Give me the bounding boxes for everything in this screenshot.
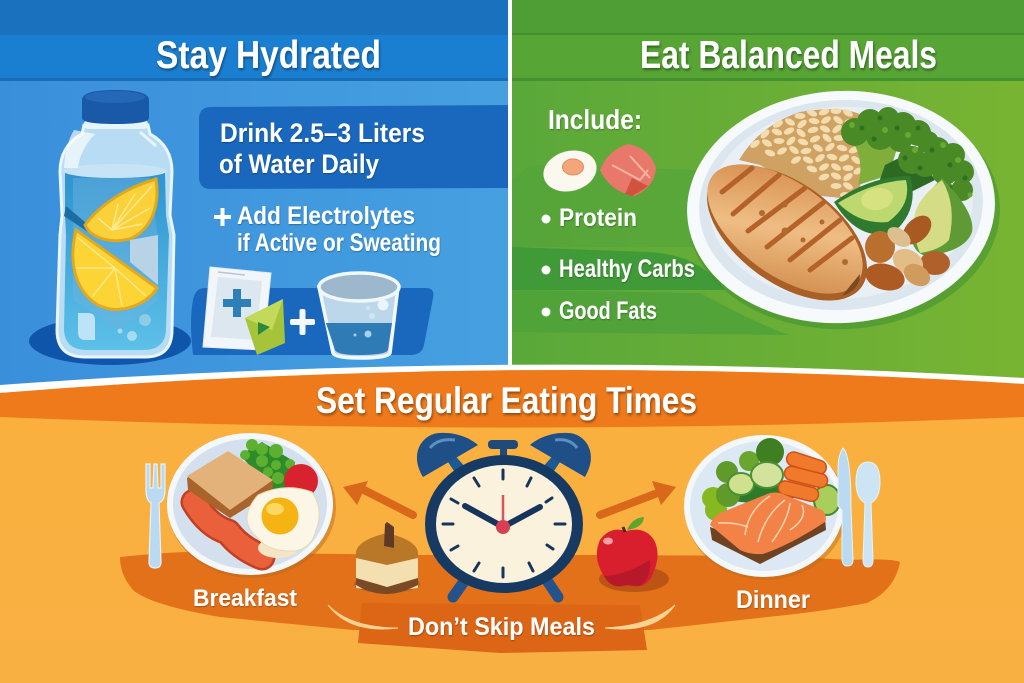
panel: stay hydrated [0,0,510,395]
panel: set regular eating times [0,365,1024,683]
info box: water amount [199,105,508,189]
under-egg layer [258,538,298,558]
icon: balanced meal plate [681,83,1006,337]
tomato [284,464,318,498]
banner: don't skip meals [358,603,647,653]
icon: fork [146,464,165,568]
icon: electrolyte packet and water glass [191,267,433,358]
icon: snack cake [354,522,420,594]
cream flourish right [605,605,675,629]
list: food groups [542,204,695,325]
label: breakfast: Breakfast [193,585,297,612]
icon: egg [539,145,601,197]
icon: meat [600,144,656,196]
text: add electrolytes [214,202,441,257]
avocado slice [834,176,913,235]
arrow: to breakfast [343,481,413,515]
text: don't skip meals: Don’t Skip Meals [408,613,595,641]
label: dinner: Dinner [736,586,810,614]
icon: breakfast plate [167,433,336,578]
clock ticks [443,470,565,577]
icon: dinner plate [684,435,847,580]
text: add electrolytes: Add Electrolytes [237,202,415,230]
icon: knife [838,448,853,566]
text: water daily: of Water Daily [219,149,379,179]
nuts [862,210,950,295]
title: stay hydrated: Stay Hydrated [156,34,381,77]
avocado half [912,178,972,256]
text: drink amount: Drink 2.5–3 Liters [220,118,425,148]
clock feet [453,582,558,597]
greens [240,439,295,490]
dinner carrots [777,450,829,503]
clock bells [417,433,591,477]
list: food groups: Healthy Carbs [559,255,695,283]
dark green text bands [512,247,725,290]
list: food groups: Protein [559,204,637,232]
panel: eat balanced meals [512,0,1024,395]
salmon [710,492,826,564]
arrow: to dinner [600,481,676,515]
orange swoosh behind meals [120,552,900,630]
icon: alarm clock [417,433,591,597]
text: add electrolytes: if Active or Sweating [237,229,441,257]
title: eat balanced meals: Eat Balanced Meals [640,34,937,77]
clock hands [465,495,540,534]
icon: apple [597,517,669,592]
rice [739,107,864,200]
grilled chicken [683,138,891,328]
cream flourish left [328,605,398,629]
list: food groups: Good Fats [559,297,657,325]
vertical divider [508,0,512,372]
icon: water bottle with lemon [29,90,191,365]
toast [187,452,273,518]
fried egg [247,488,319,551]
text: include: Include: [548,104,642,135]
bacon [194,502,262,557]
dinner broccoli [702,438,820,521]
dinner cucumber slices [728,462,840,515]
broccoli [841,107,974,202]
title: set regular eating times: Set Regular Eating Times [316,380,697,421]
icon: spoon [856,462,880,567]
